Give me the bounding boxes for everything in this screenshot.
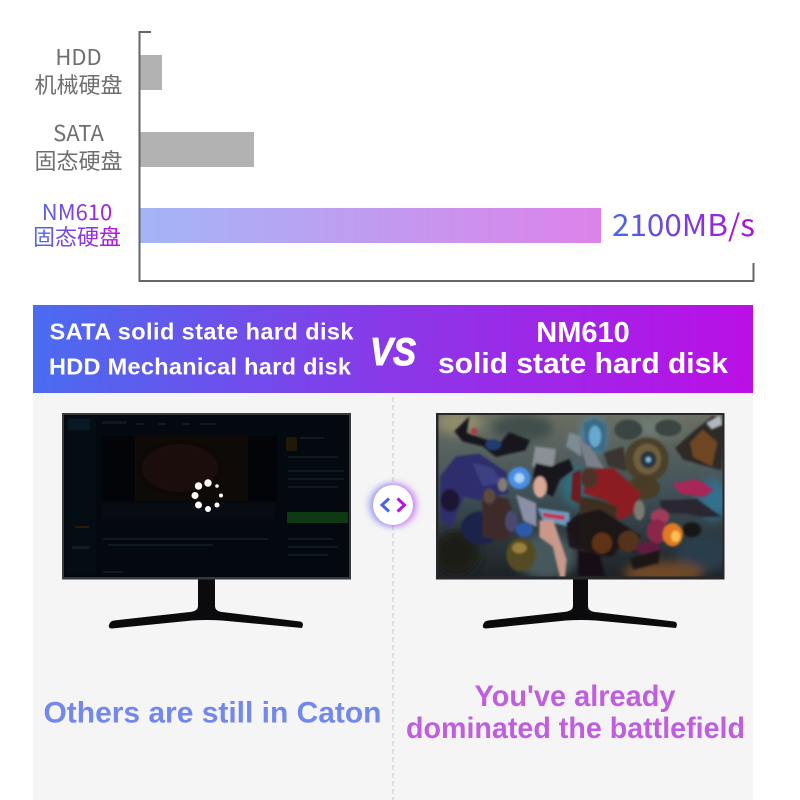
label: NM610 bbox=[33, 195, 121, 252]
center dashed divider bbox=[392, 397, 394, 800]
caption: right: dominated the battlefield bbox=[406, 712, 745, 745]
label: HDD: 机械硬盘 bbox=[34, 68, 123, 100]
purple beast bbox=[440, 454, 509, 528]
caption: left: Others are still in Caton bbox=[44, 696, 382, 730]
monitor: left, loading bbox=[62, 413, 351, 628]
left half characters bbox=[440, 416, 581, 580]
icon: loading spinner bbox=[192, 479, 223, 512]
monitor stand bbox=[483, 579, 677, 628]
game artwork bbox=[438, 415, 722, 576]
icon: compare arrows badge bbox=[369, 484, 417, 526]
armored fighter bbox=[481, 492, 512, 542]
banner text: NM610: NM610 bbox=[536, 317, 630, 349]
golem bbox=[603, 446, 627, 471]
right chevron bbox=[398, 498, 404, 512]
warrior edge bbox=[566, 512, 581, 550]
monitor frame bbox=[436, 413, 724, 580]
caption: right: You've already bbox=[474, 680, 676, 713]
bar chart: read speed bbox=[33, 32, 755, 281]
panel: comparison background bbox=[33, 393, 753, 800]
dimmed screen bbox=[64, 415, 349, 577]
banner text: competitors bbox=[49, 318, 354, 380]
label: HDD: HDD bbox=[55, 40, 102, 72]
badge glow: blue side bbox=[369, 484, 411, 526]
hammer bbox=[675, 416, 725, 470]
blue orb bbox=[508, 467, 530, 489]
central warrior bbox=[583, 468, 641, 520]
monitor stand bbox=[109, 579, 303, 628]
tower bbox=[583, 418, 607, 451]
banner VS: VS bbox=[370, 331, 416, 374]
cannons bbox=[578, 509, 641, 556]
banner text: NM610: solid state hard disk bbox=[438, 348, 729, 380]
bar: NM610 bbox=[140, 208, 601, 243]
storm clouds bbox=[614, 420, 642, 440]
banner text: NM610 bbox=[438, 317, 729, 380]
caption: right bbox=[406, 680, 745, 745]
bar: HDD bbox=[140, 55, 162, 90]
banner text: competitors: SATA solid state hard disk bbox=[50, 318, 354, 344]
left chevron bbox=[382, 498, 389, 512]
banner text: competitors: HDD Mechanical hard disk bbox=[49, 354, 352, 380]
label: HDD bbox=[34, 40, 123, 100]
monitor frame bbox=[62, 413, 351, 580]
label: SATA: SATA bbox=[53, 116, 104, 148]
right half characters bbox=[578, 416, 725, 576]
fox girl bbox=[532, 459, 573, 497]
badge glow: purple side bbox=[375, 484, 417, 526]
gunner bbox=[673, 479, 714, 497]
monitor: right, game running bbox=[433, 411, 730, 628]
flying creature bbox=[454, 416, 530, 457]
banner bbox=[33, 305, 753, 393]
label: NM610: NM610 bbox=[42, 195, 112, 227]
white drapes bbox=[532, 446, 556, 470]
bar: SATA bbox=[140, 132, 254, 167]
label: NM610: 固态硬盘 bbox=[33, 220, 121, 252]
value: 2100MB/s: 2100MB/s bbox=[612, 201, 755, 245]
label: SATA bbox=[34, 116, 123, 176]
chart axes bbox=[140, 32, 754, 281]
badge disc bbox=[373, 485, 413, 525]
yordle bbox=[516, 522, 533, 537]
label: SATA: 固态硬盘 bbox=[34, 144, 123, 176]
background tones bbox=[433, 411, 589, 580]
small champion bbox=[651, 509, 669, 525]
